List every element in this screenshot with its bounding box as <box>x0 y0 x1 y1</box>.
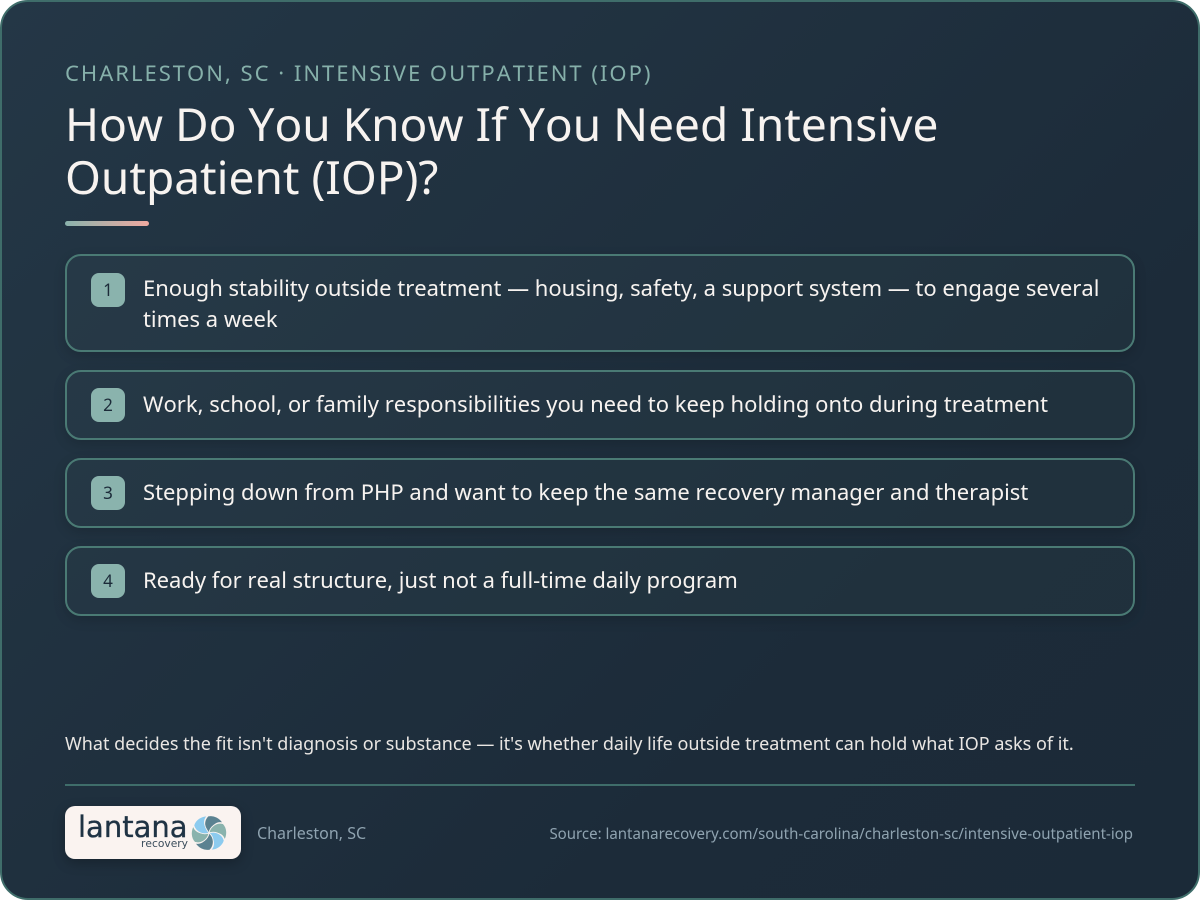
title: How Do You Know If You Need Intensive <box>65 93 938 155</box>
location label: Charleston, SC <box>257 822 366 844</box>
panel: criterion 2 <box>65 370 1135 440</box>
number badge 1 <box>91 273 125 307</box>
logo: lantana recovery <box>65 806 241 859</box>
source citation: Source: lantanarecovery.com/south-carolina/charleston-sc/intensive-outpatient-iop <box>549 824 1133 844</box>
criterion 4 text: Ready for real structure, just not a full-time daily program <box>143 565 738 595</box>
number badge 3: 3 <box>103 481 113 504</box>
panel: criterion 1 <box>65 254 1135 352</box>
criterion 3 text: Stepping down from PHP and want to keep the same recovery manager and therapist <box>143 477 1028 507</box>
logo wordmark: lantana <box>78 810 188 844</box>
closing statement: What decides the fit isn't diagnosis or substance — it's whether daily life outside treatment can hold what IOP asks of it. <box>65 732 1074 756</box>
title <box>65 93 938 208</box>
accent underline <box>65 221 149 226</box>
number badge 2 <box>91 388 125 422</box>
number badge 3 <box>91 476 125 510</box>
criterion 2 text: Work, school, or family responsibilities you need to keep holding onto during treatment <box>143 389 1048 419</box>
title: Outpatient (IOP)? <box>65 146 438 208</box>
criterion 1 text: Enough stability outside treatment — housing, safety, a support system — to engage several times a week <box>143 273 1099 334</box>
eyebrow label: CHARLESTON, SC · INTENSIVE OUTPATIENT (IOP) <box>65 58 653 88</box>
number badge 4 <box>91 564 125 598</box>
number badge 4: 4 <box>103 569 113 592</box>
number badge 2: 2 <box>103 393 113 416</box>
icon: pinwheel <box>192 816 226 850</box>
panel: criterion 4 <box>65 546 1135 616</box>
footer divider <box>65 784 1135 786</box>
panel: criterion 3 <box>65 458 1135 528</box>
logo subtitle: recovery <box>141 837 188 850</box>
number badge 1: 1 <box>103 278 113 301</box>
